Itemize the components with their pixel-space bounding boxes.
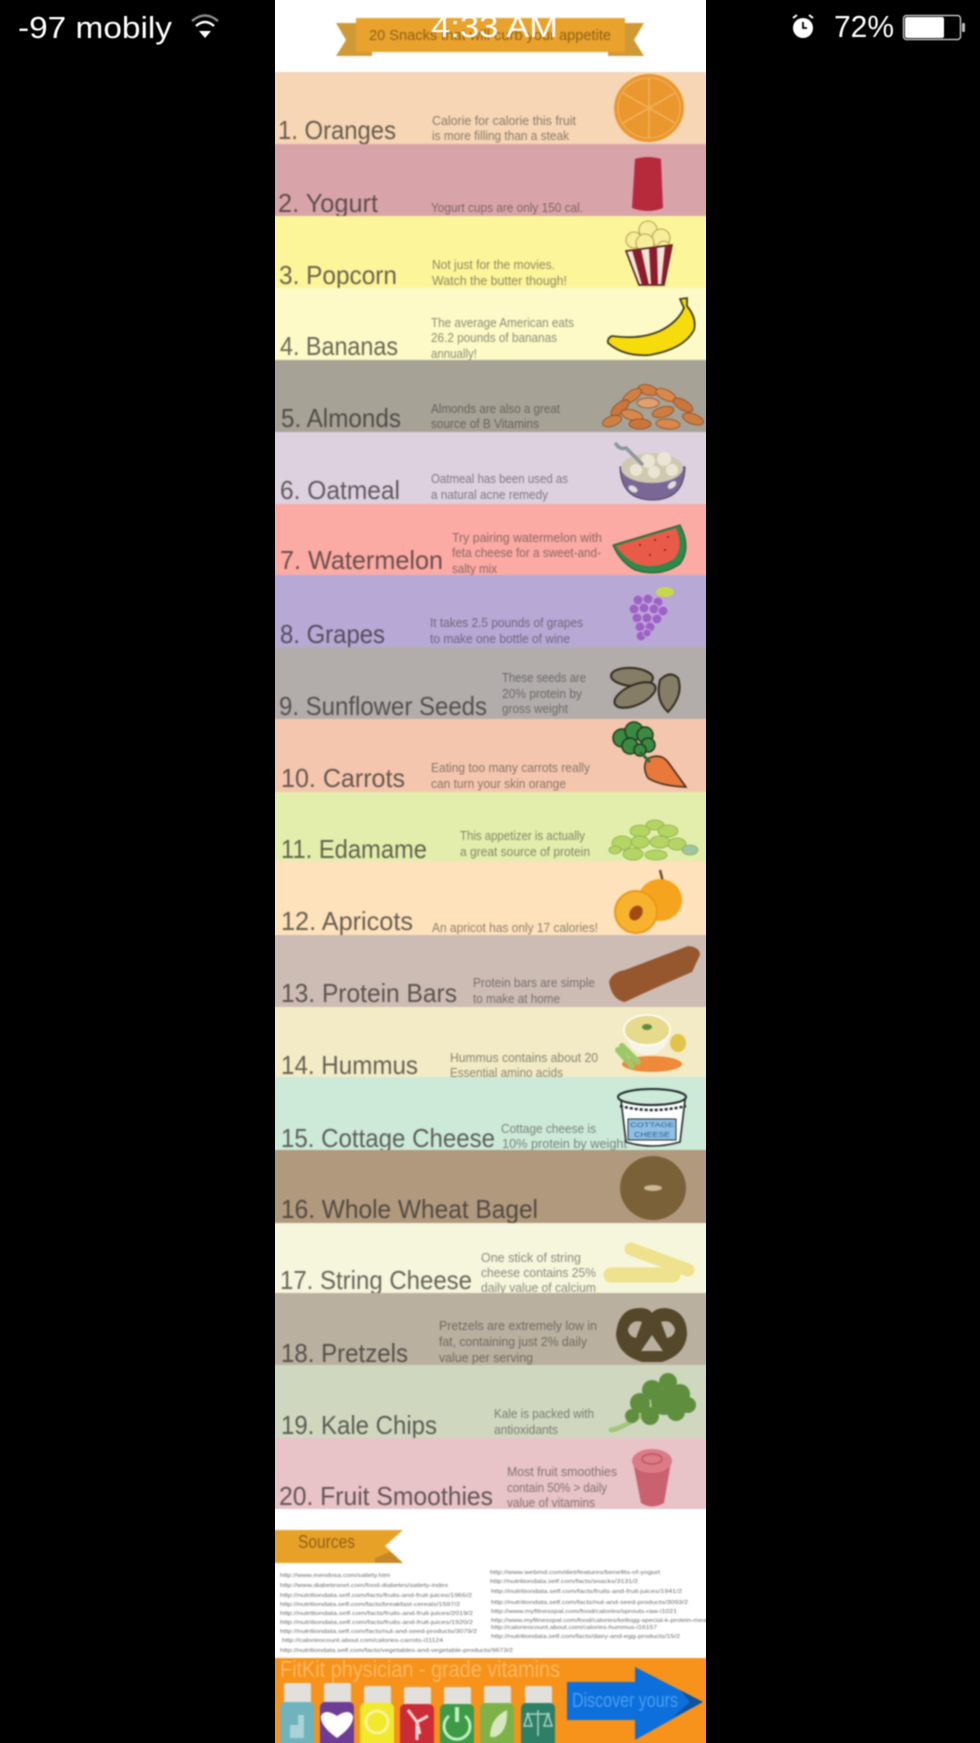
- row 15: cottage cheese: [270, 1077, 711, 1153]
- name: 4. Bananas: [280, 331, 398, 361]
- description: [431, 761, 591, 791]
- name: 20. Fruit Smoothies: [279, 1481, 493, 1511]
- name: 16. Whole Wheat Bagel: [281, 1194, 538, 1224]
- description: Most fruit smoothies: [507, 1465, 617, 1479]
- description: Kale is packed with: [494, 1407, 594, 1421]
- name: 17. String Cheese: [280, 1265, 472, 1295]
- sources list: right column: http://nutritiondata.self.com/facts/dairy-and-egg-products/15/2: [491, 1634, 680, 1640]
- row 16: whole wheat bagel: [270, 1150, 711, 1224]
- sources list: left column: http://nutritiondata.self.com/facts/vegetables-and-vegetable-products/9673/2: [280, 1648, 513, 1654]
- description: is more filling than a steak: [432, 129, 570, 143]
- row 9: sunflower seeds: [270, 647, 711, 721]
- bottle 2: [320, 1683, 354, 1743]
- description: Try pairing watermelon with: [452, 531, 602, 545]
- description: source of B Vitamins: [431, 417, 539, 431]
- description: salty mix: [452, 562, 498, 576]
- description: The average American eats: [431, 316, 574, 330]
- description: Almonds are also a great: [431, 402, 560, 416]
- description: Yogurt cups are only 150 cal.: [431, 201, 583, 215]
- name: 5. Almonds: [281, 403, 401, 433]
- description: [439, 1319, 597, 1365]
- description: to make at home: [473, 992, 560, 1006]
- row 7: watermelon: [270, 504, 711, 576]
- vitamin bottles: [280, 1683, 555, 1743]
- icon: kale: [611, 1373, 696, 1430]
- description: [431, 402, 560, 431]
- icon: apricots: [615, 870, 682, 933]
- description: [432, 114, 577, 143]
- tub label: CHEESE: [634, 1132, 670, 1139]
- bottle 4: [400, 1687, 434, 1743]
- footer heading: FitKit physician - grade vitamins: [280, 1656, 560, 1682]
- icon: string cheese: [611, 1249, 688, 1275]
- sources list: left column: http://nutritiondata.self.com/facts/fruits-and-fruit-juices/2019/2: [280, 1611, 473, 1617]
- icon: orange: [613, 73, 685, 143]
- description: antioxidants: [494, 1423, 558, 1437]
- icon: wifi: [192, 16, 218, 38]
- description: Calorie for calorie this fruit: [432, 114, 577, 128]
- icon: watermelon: [613, 525, 686, 573]
- row 14: hummus: [270, 1007, 711, 1080]
- sources list: right column: http://calorieocount.about.com/calories-hummus-i16157: [491, 1625, 657, 1631]
- sources list: right column: http://nutritiondata.self.com/facts/fruits-and-fruit-juices/1941/2: [491, 1589, 682, 1595]
- sources list: left column: http://calorieocount.about.com/calories-carrots-i11124: [282, 1638, 443, 1644]
- description: [507, 1465, 617, 1510]
- description: [431, 472, 568, 502]
- battery percentage: 72%: [834, 9, 894, 44]
- description: Eating too many carrots really: [431, 761, 591, 775]
- sources list: right column: http://www.webmd.com/diet/features/benefits-of-yogurt: [490, 1570, 661, 1576]
- row 11: edamame: [270, 792, 711, 864]
- icon: oatmeal bowl: [616, 444, 685, 500]
- name: 3. Popcorn: [279, 260, 397, 290]
- title banner: [336, 18, 644, 56]
- name: 12. Apricots: [281, 906, 413, 936]
- name: 6. Oatmeal: [280, 475, 400, 505]
- description: value of vitamins: [507, 1496, 595, 1510]
- row 20: fruit smoothies: [270, 1438, 711, 1511]
- row 17: string cheese: [270, 1223, 711, 1295]
- bottle 3: [360, 1686, 394, 1743]
- icon: banana: [608, 298, 695, 355]
- icon: edamame: [609, 820, 698, 860]
- row 12: apricots: [270, 861, 711, 936]
- sources list: right column: http://www.myfitnesspal.com/food/calories/sprouts-raw-i1021: [491, 1609, 677, 1615]
- description: [481, 1251, 596, 1295]
- sources list: left column: http://nutritiondata.self.com/facts/fruits-and-fruit-juices/1920/2: [280, 1620, 473, 1626]
- row 3: popcorn: [270, 216, 711, 290]
- description: [502, 671, 586, 716]
- name: 13. Protein Bars: [281, 978, 457, 1008]
- description: gross weight: [502, 702, 568, 716]
- description: It takes 2.5 pounds of grapes: [430, 616, 583, 630]
- description: to make one bottle of wine: [430, 632, 570, 646]
- description: 10% protein by weight: [502, 1137, 628, 1151]
- sources list: left column: http://www.diabetesnet.com/food-diabetes/satiety-index: [280, 1583, 448, 1589]
- icon: battery: [904, 16, 965, 40]
- sources list: left column: http://nutritiondata.self.com/facts/nut-and-seed-products/3079/2: [280, 1629, 477, 1635]
- description: Hummus contains about 20: [450, 1051, 598, 1065]
- name: 18. Pretzels: [281, 1338, 408, 1368]
- description: [450, 1051, 598, 1080]
- description: a great source of protein: [460, 845, 590, 859]
- row 19: kale chips: [270, 1365, 711, 1440]
- bottle 1: [280, 1683, 314, 1743]
- icon: bagel: [620, 1156, 686, 1220]
- icon: carrot: [613, 722, 686, 787]
- tub label: [630, 1123, 674, 1139]
- description: [460, 829, 590, 859]
- sources ribbon: [270, 1530, 403, 1563]
- name: 19. Kale Chips: [281, 1410, 437, 1440]
- name: 2. Yogurt: [278, 188, 379, 218]
- description: Pretzels are extremely low in: [439, 1319, 597, 1333]
- name: 9. Sunflower Seeds: [279, 691, 487, 721]
- sources list: right column: http://nutritiondata.self.com/facts/snacks/3131/2: [490, 1579, 638, 1585]
- description: This appetizer is actually: [460, 829, 586, 843]
- bottle 5: [440, 1687, 474, 1743]
- icon: yogurt cup: [632, 157, 663, 211]
- description: Essential amino acids: [450, 1066, 563, 1080]
- description: fat, containing just 2% daily: [439, 1335, 588, 1349]
- description: 20% protein by: [502, 687, 583, 701]
- title: 20 Snacks that will curb your appetite: [369, 27, 611, 44]
- sources list: left column: http://nutritiondata.self.com/facts/breakfast-cereals/1597/2: [280, 1602, 460, 1608]
- icon: cottage cheese tub: [618, 1089, 686, 1146]
- description: These seeds are: [502, 671, 586, 685]
- icon: popcorn: [626, 221, 672, 285]
- sources list: left column: [280, 1573, 513, 1654]
- icon: hummus: [618, 1015, 686, 1072]
- description: a natural acne remedy: [431, 488, 549, 502]
- name: 1. Oranges: [278, 115, 396, 145]
- description: [452, 531, 602, 576]
- description: 26.2 pounds of bananas: [431, 331, 557, 345]
- name: 7. Watermelon: [280, 545, 443, 575]
- description: [430, 616, 583, 646]
- icon: alarm: [793, 15, 813, 38]
- name: 15. Cottage Cheese: [281, 1123, 495, 1153]
- description: Cottage cheese is: [501, 1122, 596, 1136]
- name: 8. Grapes: [280, 619, 385, 649]
- sources list: right column: http://nutritiondata.self.com/facts/nut-and-seed-products/3093/2: [491, 1600, 688, 1606]
- description: feta cheese for a sweet-and-: [452, 546, 601, 560]
- row 2: yogurt: [270, 144, 711, 218]
- sources list: left column: http://www.mendosa.com/satiety.htm: [280, 1573, 390, 1579]
- arrow: discover yours: [567, 1667, 703, 1740]
- row 6: oatmeal: [270, 432, 711, 505]
- description: Not just for the movies.: [432, 258, 555, 272]
- status bar: [18, 9, 965, 45]
- name: 11. Edamame: [281, 834, 427, 864]
- bottle 6: [480, 1686, 514, 1743]
- arrow label: Discover yours: [572, 1690, 678, 1712]
- description: daily value of calcium: [481, 1281, 596, 1295]
- row 10: carrots: [270, 719, 711, 793]
- icon: protein bar: [609, 946, 700, 1002]
- sources list: left column: http://nutritiondata.self.com/facts/fruits-and-fruit-juices/1966/2: [280, 1593, 472, 1599]
- description: value per serving: [439, 1351, 533, 1365]
- sources heading: Sources: [298, 1532, 355, 1552]
- description: annually!: [431, 347, 477, 361]
- name: 14. Hummus: [281, 1050, 418, 1080]
- description: Oatmeal has been used as: [431, 472, 568, 486]
- icon: smoothie: [632, 1449, 672, 1506]
- clock: 4:33 AM: [431, 9, 558, 44]
- description: can turn your skin orange: [431, 777, 566, 791]
- row 13: protein bars: [270, 935, 711, 1008]
- description: [473, 976, 595, 1006]
- description: [501, 1122, 628, 1151]
- tub label: COTTAGE: [630, 1123, 674, 1129]
- icon: sunflower seeds: [610, 667, 680, 713]
- row 5: almonds: [270, 360, 711, 433]
- bottle 7: [521, 1686, 555, 1743]
- description: cheese contains 25%: [481, 1266, 596, 1280]
- description: An apricot has only 17 calories!: [432, 921, 598, 935]
- description: [432, 258, 567, 288]
- carrier label: -97 mobily: [18, 10, 173, 45]
- description: [494, 1407, 594, 1437]
- row 4: bananas: [270, 288, 711, 361]
- description: Protein bars are simple: [473, 976, 595, 990]
- description: Watch the butter though!: [432, 274, 567, 288]
- description: [431, 316, 574, 361]
- icon: pretzel: [616, 1308, 687, 1362]
- icon: grapes: [629, 587, 674, 641]
- row 1: oranges: [275, 71, 706, 145]
- sources list: right column: [490, 1570, 708, 1640]
- description: One stick of string: [481, 1251, 581, 1265]
- row 8: grapes: [270, 575, 711, 649]
- icon: almonds: [601, 383, 705, 430]
- name: 10. Carrots: [281, 763, 405, 793]
- description: contain 50% > daily: [507, 1481, 608, 1495]
- row 18: pretzels: [270, 1293, 711, 1368]
- sources list: right column: http://www.myfitnesspal.com/food/calories/kellogg-special-k-protein-meal: [491, 1618, 708, 1624]
- footer panel: vitamins: [270, 1656, 711, 1743]
